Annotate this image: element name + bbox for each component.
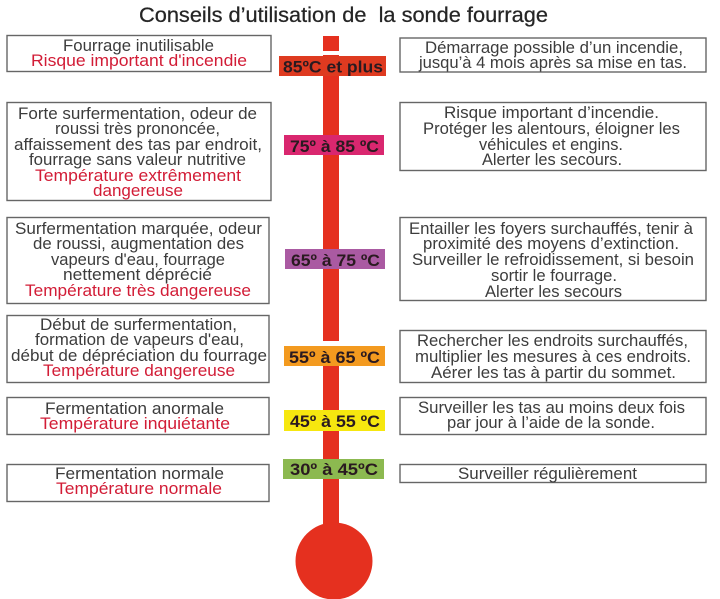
panel: left 75-85: affaissement des tas par endroit, — [14, 136, 262, 154]
thermometer — [296, 36, 372, 599]
panel: right 30-45 — [400, 464, 706, 483]
panel: right 55-65: Aérer les tas à partir du sommet. — [431, 364, 676, 382]
panel: right 65-75: proximité des moyens d’extinction. — [423, 235, 679, 253]
panel: left 65-75: nettement déprécié — [63, 266, 212, 284]
panel: left 65-75: Surfermentation marquée, odeur — [15, 220, 263, 238]
thermometer stem upper — [323, 55, 339, 341]
label: 55 to 65 °C: 55º à 65 ºC — [289, 348, 380, 367]
label: 30 to 45 °C: 30º à 45ºC — [290, 460, 378, 479]
panel: left 65-75: vapeurs d'eau, fourrage — [51, 251, 225, 269]
panel: right 75-85: véhicules et engins. — [479, 136, 623, 154]
panel: left 75-85: dangereuse — [93, 182, 183, 200]
panel: right 65-75: Surveiller le refroidissement, si besoin — [412, 251, 694, 269]
panel: left 45-55: Température inquiétante — [40, 415, 230, 433]
thermometer stem top — [323, 36, 339, 51]
panel: right 30-45: Surveiller régulièrement — [458, 465, 638, 483]
thermometer stem lower — [323, 346, 339, 531]
panel: right 85: jusqu’à 4 mois après sa mise en tas. — [418, 54, 687, 72]
panel: left 85: Fourrage inutilisable — [63, 37, 214, 55]
panel: left 55-65: Début de surfermentation, — [40, 316, 237, 334]
panel: left 30-45 — [7, 464, 269, 502]
panel: right 55-65: Rechercher les endroits surchauffés, — [417, 332, 688, 350]
label: 75 to 85 °C: 75º à 85 ºC — [290, 137, 379, 156]
panel: left 65-75: de roussi, augmentation des — [33, 235, 244, 253]
panel: left 55-65: formation de vapeurs d'eau, — [35, 331, 244, 349]
panel: left 85: Risque important d'incendie — [31, 52, 247, 70]
panel: right 85 — [400, 38, 706, 72]
panel: left 75-85: roussi très prononcée, — [55, 120, 220, 138]
panel: left 65-75 — [7, 218, 269, 304]
panel: right 65-75: Entailler les foyers surchauffés, tenir à — [409, 220, 693, 238]
panel: right 65-75: sortir le fourrage. — [491, 267, 617, 285]
panel: right 75-85: Risque important d’incendie. — [444, 104, 659, 122]
panel: left 45-55 — [7, 398, 269, 434]
panel: left 55-65: Température dangereuse — [43, 362, 235, 380]
panel: left 45-55: Fermentation anormale — [45, 400, 224, 418]
panel: left 55-65: début de dépréciation du fourrage — [11, 347, 267, 365]
panel: left 75-85 — [7, 102, 271, 200]
label: 85°C et plus: 85ºC et plus — [283, 58, 383, 76]
panel: left 75-85: Température extrêmement — [35, 167, 242, 185]
panel: right 65-75 — [400, 218, 706, 301]
panel: right 45-55: par jour à l’aide de la sonde. — [447, 414, 655, 432]
panel: left 75-85: Forte surfermentation, odeur de — [18, 105, 257, 123]
panel: right 55-65 — [400, 330, 706, 382]
panel: left 65-75: Température très dangereuse — [25, 282, 251, 300]
label: 45 to 55 °C: 45º à 55 ºC — [290, 412, 380, 431]
panel: left 55-65 — [7, 316, 269, 382]
panel: right 85: Démarrage possible d’un incendie, — [425, 39, 683, 57]
panel: right 55-65: multiplier les mesures à ces endroits. — [415, 348, 691, 366]
thermometer bulb — [296, 522, 372, 599]
panel: right 75-85: Protéger les alentours, éloigner les — [423, 120, 680, 138]
title: Conseils d’utilisation de la sonde fourrage — [139, 3, 548, 27]
panel: right 75-85: Alerter les secours. — [482, 151, 622, 169]
panel: left 75-85: fourrage sans valeur nutritive — [29, 151, 246, 169]
panel: right 45-55 — [400, 398, 706, 434]
panel: left 30-45: Température normale — [56, 480, 222, 498]
panel: right 45-55: Surveiller les tas au moins deux fois — [418, 399, 685, 417]
panel: right 65-75: Alerter les secours — [485, 283, 622, 301]
label: 65 to 75 °C: 65º à 75 ºC — [291, 251, 380, 270]
panel: left 30-45: Fermentation normale — [55, 465, 224, 483]
panel: left 85 — [7, 36, 271, 72]
panel: right 75-85 — [400, 102, 706, 170]
